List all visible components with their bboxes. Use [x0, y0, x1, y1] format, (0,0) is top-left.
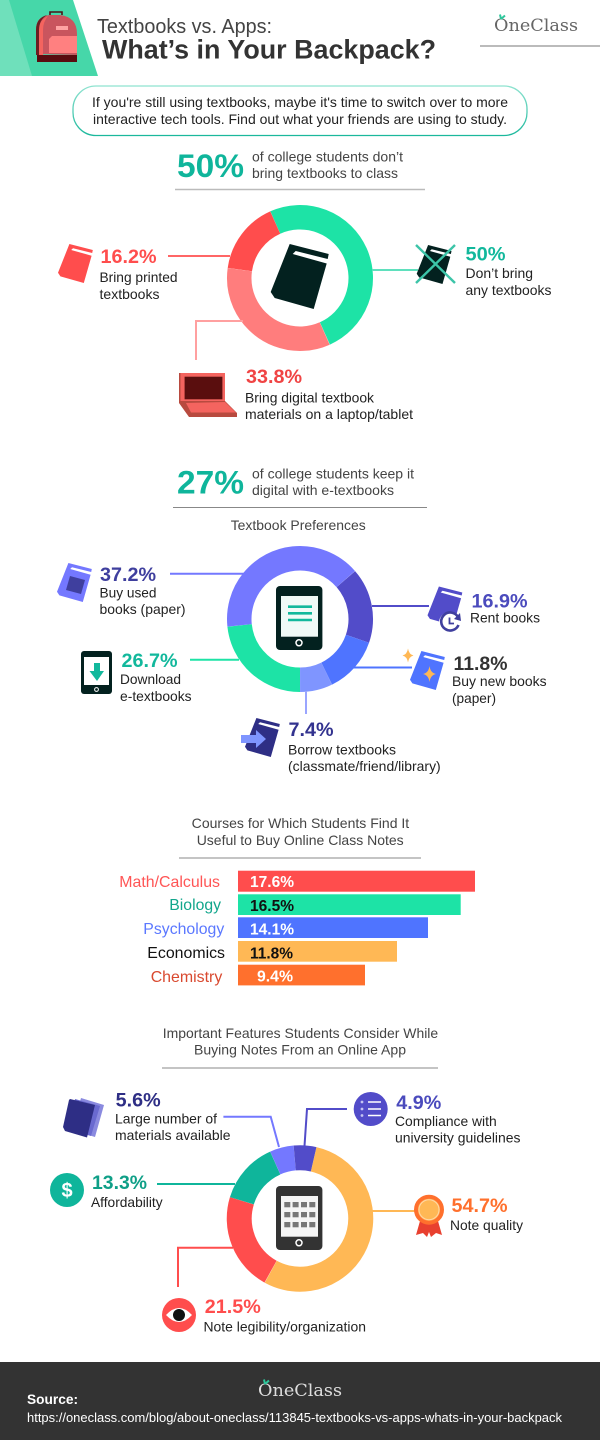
bar: Economics: Economics — [147, 945, 225, 962]
icon: crossed-out book — [416, 245, 455, 284]
label: 7.4%: Borrow textbooks — [288, 742, 396, 758]
label: 33.8%: materials on a laptop/tablet — [245, 406, 413, 422]
label: 21.5%: 21.5% — [205, 1297, 261, 1318]
label: 13.3% — [91, 1173, 163, 1210]
heading: courses — [179, 815, 421, 858]
connector: materials — [223, 1117, 279, 1147]
icon: dollar circle — [50, 1173, 84, 1207]
label: 26.7%: Download — [120, 671, 181, 687]
source text: https://oneclass.com/blog/about-oneclass/113845-textbooks-vs-apps-whats-in-your-backpack — [27, 1411, 563, 1425]
label: 16.2%: Bring printed — [100, 269, 178, 285]
icon: used book — [57, 563, 92, 602]
label: 21.5%: Note legibility/organization — [204, 1318, 366, 1334]
heading: important features: Important Features Students Consider While — [163, 1025, 438, 1041]
intro callout — [73, 86, 527, 136]
label: 11.8% — [452, 654, 547, 706]
connector: legibility — [178, 1248, 233, 1287]
label: 54.7% — [450, 1196, 523, 1233]
panel: features donut — [50, 1091, 523, 1334]
label: 5.6%: Large number of — [115, 1110, 217, 1126]
bar: Biology — [169, 894, 461, 915]
label: 26.7% — [120, 651, 192, 704]
icon: borrow book — [241, 718, 280, 757]
label: 7.4%: 7.4% — [288, 720, 334, 741]
label: 37.2%: books (paper) — [100, 601, 186, 617]
icon: dollar circle: $ — [61, 1180, 73, 1202]
panel: textbook preferences donut — [57, 533, 547, 774]
icon: stack of books — [63, 1098, 104, 1138]
connector: used — [170, 573, 244, 575]
label: 13.3%: Affordability — [91, 1194, 163, 1210]
heading: important features: Buying Notes From an Online App — [194, 1042, 406, 1058]
label: 26.7%: 26.7% — [122, 651, 178, 672]
title: What’s in Your Backpack? — [102, 34, 436, 64]
logo: OneClass: OneClass — [494, 16, 578, 35]
stat heading: 27%: 27% — [177, 464, 244, 500]
label: 4.9%: Compliance with — [395, 1113, 497, 1129]
label: 11.8%: Buy new books — [452, 673, 547, 689]
label: 50%: any textbooks — [466, 282, 552, 298]
intro callout: If you're still using textbooks, maybe it's time to switch over to more — [92, 94, 508, 110]
connector: new — [352, 666, 412, 668]
label: 37.2%: Buy used — [100, 584, 156, 600]
label: 54.7%: 54.7% — [452, 1196, 508, 1217]
label: 7.4% — [288, 720, 441, 774]
stat heading: 50%: 50% — [177, 148, 244, 184]
stat heading: 27%: of college students keep it — [252, 466, 414, 482]
label: 33.8%: 33.8% — [246, 367, 302, 388]
label: 16.9% — [470, 592, 540, 626]
label: 7.4%: (classmate/friend/library) — [288, 758, 441, 774]
heading: courses: Useful to Buy Online Class Notes — [197, 832, 404, 848]
donut chart 1 — [220, 198, 380, 358]
label: 54.7%: Note quality — [450, 1217, 523, 1233]
icon: checklist circle — [354, 1092, 388, 1126]
label: 16.9%: 16.9% — [472, 592, 528, 612]
logo: footer OneClass: OneClass — [258, 1381, 342, 1400]
connector: borrow — [305, 691, 307, 714]
stat heading: 27% — [173, 464, 427, 533]
intro callout: interactive tech tools. Find out what your friends are using to study. — [93, 111, 507, 127]
connector: digital — [196, 321, 243, 360]
stat heading: 50%: bring textbooks to class — [252, 165, 398, 181]
label: 37.2% — [100, 565, 186, 617]
label: 5.6%: 5.6% — [116, 1091, 161, 1112]
source text — [27, 1391, 563, 1425]
label: 4.9%: university guidelines — [395, 1130, 520, 1146]
connector: printed — [168, 255, 230, 257]
icon: download tablet — [81, 651, 112, 694]
bar: Chemistry: 9.4% — [257, 969, 293, 986]
icon: tablet with apps — [276, 1186, 322, 1250]
bar: Math/Calculus: 17.6% — [250, 874, 294, 891]
bar: Economics — [147, 941, 397, 962]
label: 33.8%: Bring digital textbook — [245, 390, 375, 406]
label: 21.5% — [204, 1297, 366, 1334]
heading: important features — [162, 1025, 438, 1068]
bar: Biology: Biology — [169, 897, 221, 914]
connector: affordability — [157, 1183, 235, 1185]
label: 4.9%: 4.9% — [396, 1093, 441, 1114]
label: 13.3%: 13.3% — [92, 1173, 147, 1194]
label: 5.6%: materials available — [115, 1127, 231, 1143]
bar: Biology: 16.5% — [250, 898, 294, 915]
connector: quality — [372, 1210, 415, 1212]
connector: compliance — [304, 1109, 347, 1146]
stat heading: 27%: digital with e-textbooks — [252, 482, 394, 498]
icon: backpack — [36, 12, 77, 62]
donut chart 3 — [217, 1136, 383, 1301]
heading: courses: Courses for Which Students Find It — [192, 815, 409, 831]
title: Textbooks vs. Apps: — [97, 16, 272, 38]
connector: download — [190, 659, 239, 661]
label: 11.8%: (paper) — [452, 690, 496, 706]
label: 5.6% — [115, 1091, 231, 1143]
stat heading: 50% — [175, 148, 425, 190]
bar: Psychology: 14.1% — [250, 922, 294, 938]
connector: no books — [372, 269, 418, 271]
label: 50%: Don’t bring — [466, 265, 533, 281]
panel: bring textbooks donut — [58, 198, 552, 422]
footer — [0, 1362, 600, 1440]
bar: Psychology — [143, 917, 428, 938]
panel: courses bar chart — [119, 815, 475, 986]
logo: OneClass — [480, 14, 600, 46]
bar: Economics: 11.8% — [250, 946, 293, 962]
label: 16.2%: 16.2% — [100, 247, 157, 268]
icon: dark book — [271, 244, 329, 309]
source text: Source: — [27, 1391, 78, 1407]
bar: Chemistry: Chemistry — [151, 969, 222, 986]
label: 4.9% — [395, 1093, 520, 1146]
label: 16.2% — [100, 247, 178, 302]
label: 11.8%: 11.8% — [454, 654, 508, 675]
icon: medal — [416, 1197, 442, 1237]
title — [97, 16, 436, 64]
label: 37.2%: 37.2% — [100, 565, 156, 586]
bar: Math/Calculus: Math/Calculus — [119, 874, 220, 891]
label: 16.2%: textbooks — [100, 286, 160, 302]
icon: eye circle — [162, 1298, 196, 1332]
label: 50%: 50% — [466, 244, 506, 266]
icon: laptop — [179, 373, 237, 417]
icon: red book — [58, 244, 93, 283]
header banner — [0, 0, 98, 76]
label: 26.7%: e-textbooks — [120, 688, 192, 704]
bar: Psychology: Psychology — [143, 921, 224, 938]
icon: new book with sparkles — [402, 648, 445, 690]
bar: Chemistry — [151, 965, 365, 986]
stat heading: 27%: Textbook Preferences — [231, 517, 366, 533]
label: 50% — [466, 244, 552, 298]
bar: Math/Calculus — [119, 871, 475, 892]
stat heading: 50%: of college students don’t — [252, 148, 403, 164]
icon: tablet with text — [276, 586, 322, 650]
donut chart 2 — [214, 533, 386, 705]
label: 16.9%: Rent books — [470, 610, 540, 626]
connector: rent — [372, 605, 429, 607]
label: 33.8% — [245, 367, 413, 422]
icon: rent book with clock — [428, 586, 462, 633]
